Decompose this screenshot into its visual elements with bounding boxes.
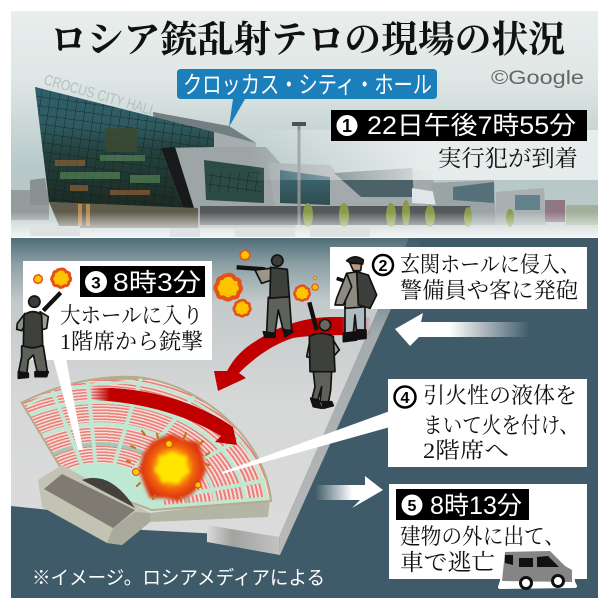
callout: step 4: まいて火を付け、 [423, 413, 579, 438]
label: step 1 time: 1 [342, 116, 352, 136]
callout: step 3: 1階席から銃撃 [60, 329, 203, 354]
callout: step 4 [222, 379, 587, 474]
callout: venue name: クロッカス・シティ・ホール [183, 72, 432, 99]
callout: step 4: 2階席へ [423, 438, 509, 463]
icon: getaway van [500, 551, 575, 588]
callout: step 3: 大ホールに入り [60, 303, 203, 328]
figure: gunman with raised rifle, right centre [307, 302, 339, 408]
arrow: red route from entrance [214, 317, 372, 391]
photo credit: ©Google [491, 68, 584, 89]
icon: muzzle flashes [215, 250, 318, 316]
callout: venue name [177, 69, 437, 127]
title: ロシア銃乱射テロの現場の状況 [50, 19, 565, 61]
label: step 1 time [331, 110, 587, 141]
figure: gunman with backpack, far right [335, 257, 377, 342]
panel: floor plan scene [11, 238, 598, 598]
callout: step 5: 8時13分 [430, 492, 522, 520]
photo: Crocus City Hall [11, 11, 598, 237]
stage block [38, 465, 150, 545]
footnote: ※イメージ。ロシアメディアによる [32, 567, 325, 589]
callout: step 5: 車で逃亡 [400, 550, 495, 575]
label: step 1 time: 22日午後7時55分 [367, 112, 576, 140]
arrow: white entering [395, 313, 530, 346]
photo: Crocus City Hall: CROCUS CITY HALL [42, 72, 158, 120]
callout: step 2: 2 [379, 258, 388, 275]
callout: step 5: 建物の外に出て、 [400, 524, 565, 549]
callout: step 3: 3 [91, 274, 101, 292]
callout: step 2 [330, 247, 587, 309]
callout: step 3 [23, 261, 212, 450]
callout: step 4: 引火性の液体を [423, 383, 577, 408]
figure: gunman with rifle, left [17, 293, 61, 378]
callout: step 5 [389, 484, 587, 579]
callout: step 3: 8時3分 [113, 269, 201, 297]
callout: step 5: 5 [408, 498, 417, 515]
explosion [127, 431, 209, 501]
arrow: red path through seating [92, 388, 237, 445]
diagram: auditorium seating [20, 376, 272, 522]
callout: step 4: 4 [401, 390, 410, 407]
arrow: white leaving [315, 476, 383, 508]
callout: step 2: 玄関ホールに侵入、 [400, 252, 580, 277]
callout: step 2: 警備員や客に発砲 [400, 278, 578, 303]
figure: gunman aiming, centre [237, 255, 293, 337]
text: step 1 description: 実行犯が到着 [438, 146, 578, 171]
